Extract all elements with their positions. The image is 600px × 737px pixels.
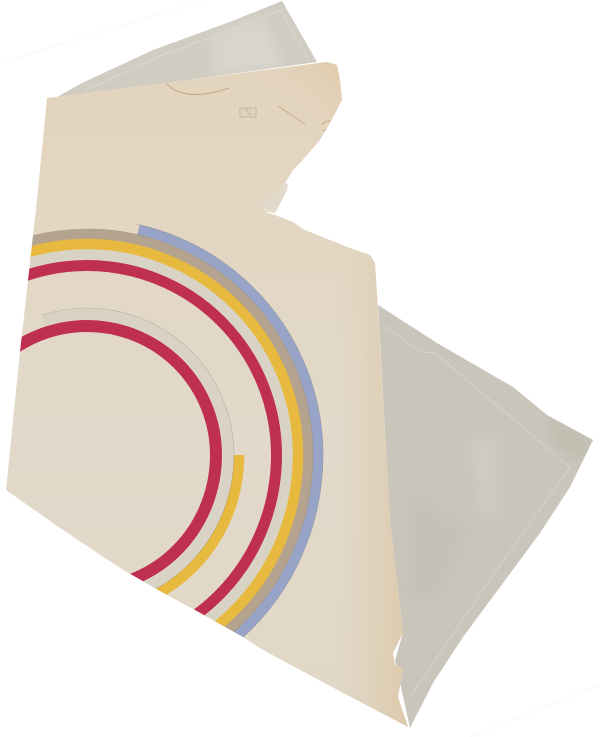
arc: blue outer [138,224,324,638]
paper surface [0,50,420,737]
arc: pale grey outer [29,249,293,621]
backing sheet: top [58,1,317,97]
arc: yellow [30,238,304,626]
arc: pale grey inner [44,314,228,601]
arc: red inner [0,326,216,588]
arc: brown [32,228,314,632]
torn paper tab [262,183,288,213]
paper sheet with rings [0,50,420,737]
paper marks [167,84,334,131]
arc: yellow inner [156,455,244,595]
arc: red outer [28,260,282,616]
backing sheet: right [370,300,600,737]
ring outlines [42,224,324,638]
